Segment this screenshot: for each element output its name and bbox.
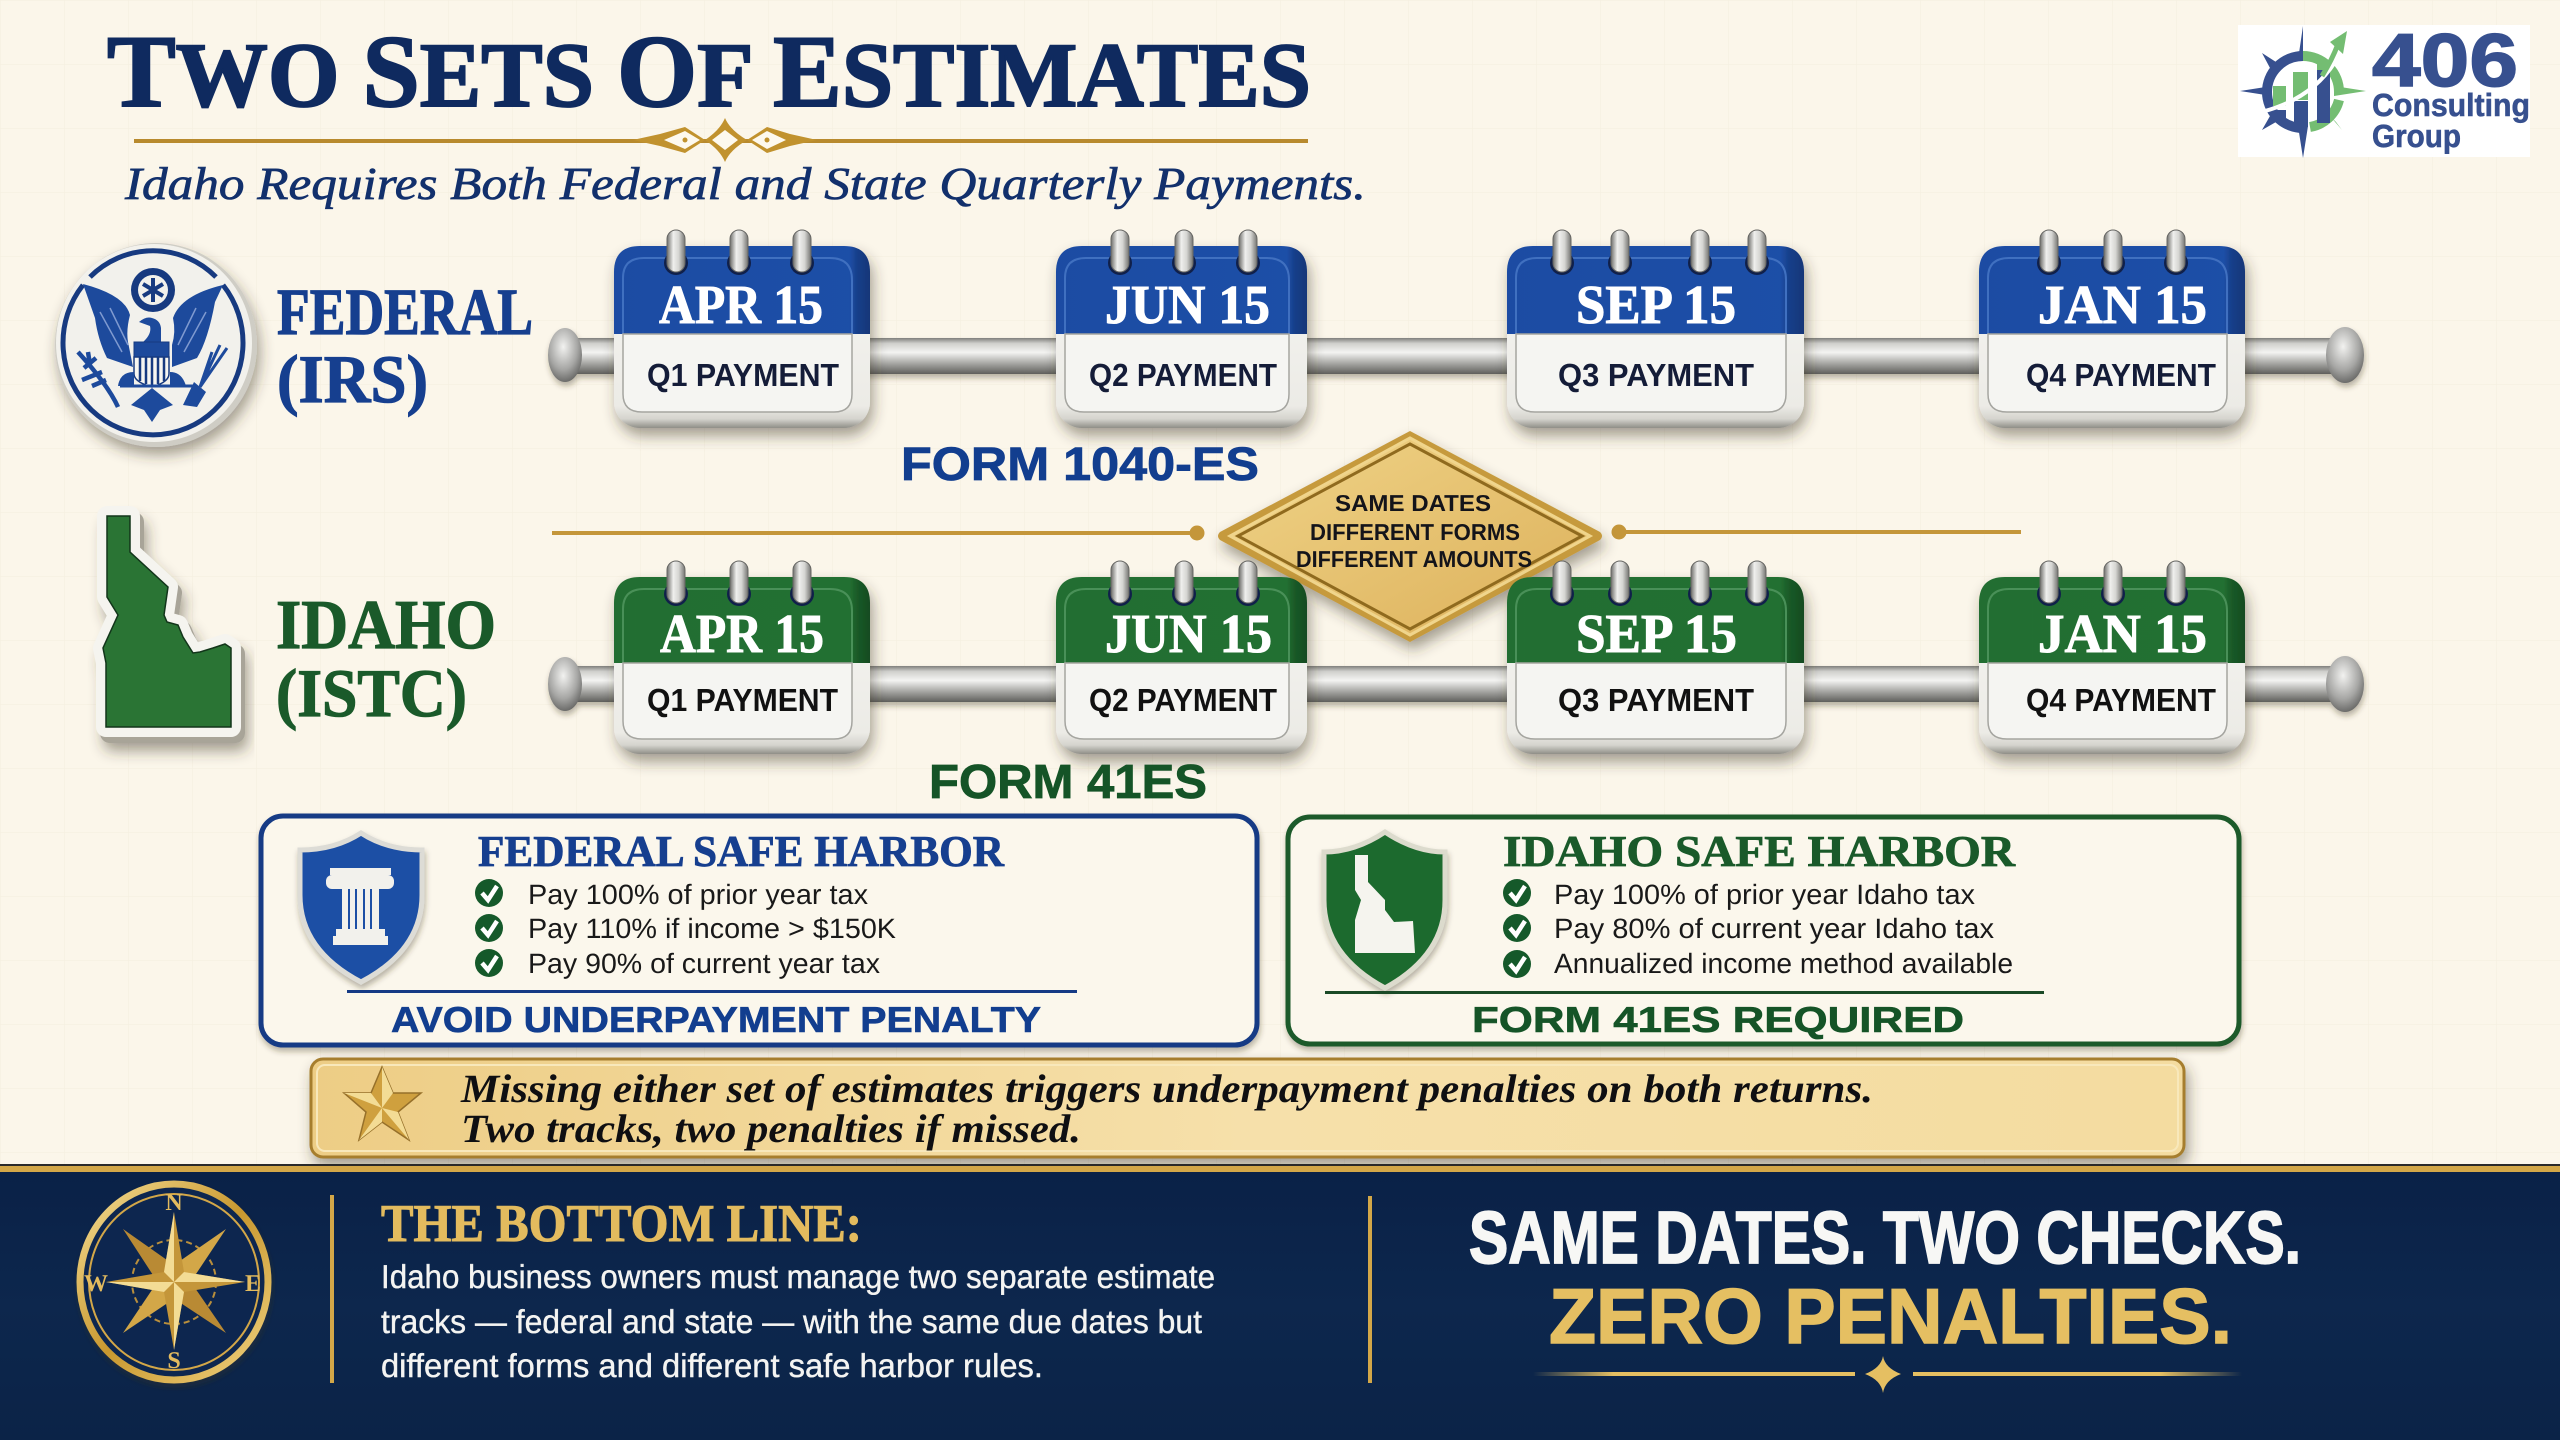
calendar: federal Q1: APR 15	[659, 274, 823, 335]
calendar: Idaho Q4: JAN 15	[2038, 603, 2207, 664]
logo: 406 Consulting Group: 406	[2372, 18, 2518, 102]
calendar: Idaho Q1	[614, 561, 870, 754]
divider left	[330, 1195, 334, 1383]
logo: 406 Consulting Group: Group	[2372, 118, 2461, 154]
calendar: federal Q4: Q4 PAYMENT	[2026, 357, 2216, 393]
checklist: federal rules: Pay 100% of prior year tax	[528, 879, 868, 910]
checklist: federal rules: Pay 90% of current year tax	[528, 948, 880, 979]
calendar: Idaho Q4	[1979, 561, 2245, 754]
body text: bottom line	[381, 1258, 1215, 1384]
logo: 406 Consulting Group	[2238, 18, 2530, 158]
heading: Idaho safe harbor: IDAHO SAFE HARBOR	[1503, 827, 2016, 876]
calendar: federal Q2: Q2 PAYMENT	[1089, 357, 1277, 393]
calendar: federal Q2: JUN 15	[1105, 274, 1270, 335]
divider right	[1368, 1196, 1372, 1383]
calendar: Idaho Q2	[1056, 561, 1307, 754]
calendar: Idaho Q2: JUN 15	[1105, 603, 1272, 664]
callout diamond: same dates: SAME DATES	[1335, 490, 1491, 516]
callout diamond: same dates	[1218, 431, 1602, 642]
checklist: Idaho rules: Pay 80% of current year Idaho tax	[1554, 913, 1994, 944]
calendar: federal Q2	[1056, 230, 1307, 428]
calendar: federal Q4: JAN 15	[2038, 274, 2207, 335]
Idaho timeline rod	[548, 656, 2364, 712]
body text: bottom line: different forms and different safe harbor rules.	[381, 1347, 1043, 1384]
calendar: Idaho Q3: SEP 15	[1576, 603, 1737, 664]
calendar: federal Q3: Q3 PAYMENT	[1558, 357, 1754, 393]
icon: compass rose	[80, 1184, 268, 1380]
calendar: federal Q1: Q1 PAYMENT	[647, 357, 839, 393]
calendar: Idaho Q4: Q4 PAYMENT	[2026, 682, 2216, 718]
label: Idaho (ISTC): IDAHO	[276, 587, 496, 664]
label: Federal (IRS): (IRS)	[277, 341, 428, 417]
federal timeline rod	[548, 327, 2364, 383]
panel footer: avoid underpayment penalty: AVOID UNDERPAYMENT PENALTY	[391, 999, 1041, 1040]
icon: compass rose: S	[167, 1348, 181, 1374]
slogan ornament	[1533, 1356, 2242, 1393]
body text: bottom line: Idaho business owners must manage two separate estimate	[381, 1258, 1215, 1295]
icon: federal eagle seal	[55, 243, 257, 447]
slogan: ZERO PENALTIES.	[1549, 1272, 2232, 1360]
icon: Idaho state shape	[103, 516, 235, 733]
calendar: Idaho Q3: Q3 PAYMENT	[1558, 682, 1754, 718]
title divider ornament	[134, 118, 1308, 162]
callout diamond: same dates: DIFFERENT FORMS	[1310, 519, 1520, 545]
calendar: Idaho Q2: Q2 PAYMENT	[1089, 682, 1277, 718]
body text: bottom line: tracks — federal and state — with the same due dates but	[381, 1303, 1202, 1340]
heading: the bottom line: THE BOTTOM LINE:	[381, 1195, 862, 1253]
icon: compass rose: W	[84, 1271, 108, 1297]
calendar: federal Q3	[1507, 230, 1804, 428]
checklist: Idaho rules: Annualized income method available	[1554, 948, 2013, 979]
banner text: Missing either set of estimates triggers underpayment penalties on both returns.	[460, 1066, 1873, 1111]
banner text	[460, 1066, 1873, 1151]
icon: compass rose: E	[245, 1271, 261, 1297]
checklist: Idaho rules	[1503, 879, 2013, 979]
logo: 406 Consulting Group: Consulting	[2372, 87, 2530, 123]
icon: compass rose: N	[165, 1190, 183, 1216]
checklist: federal rules: Pay 110% if income > $150K	[528, 913, 896, 944]
icon: federal shield with pillar	[300, 833, 422, 982]
gold connector right	[1612, 524, 2021, 540]
form label: Form 1040-ES: FORM 1040-ES	[901, 437, 1259, 490]
bottom band	[0, 1164, 2560, 1440]
slogan: SAME DATES. TWO CHECKS.	[1469, 1196, 2301, 1279]
form label: Form 41ES: FORM 41ES	[929, 756, 1207, 809]
label: Idaho (ISTC)	[276, 587, 496, 731]
banner text: Two tracks, two penalties if missed.	[461, 1106, 1081, 1151]
checklist: Idaho rules: Pay 100% of prior year Idaho tax	[1554, 879, 1975, 910]
subtitle: Idaho Requires Both Federal and State Quarterly Payments.	[124, 158, 1366, 209]
heading: federal safe harbor: FEDERAL SAFE HARBOR	[478, 827, 1005, 876]
checklist: federal rules	[475, 879, 896, 979]
calendar: Idaho Q3	[1507, 561, 1804, 754]
gold connector left	[552, 526, 1204, 540]
title: TWO SETS OF ESTIMATES	[107, 15, 1311, 129]
callout banner: penalty warning	[311, 1059, 2184, 1157]
calendar: Idaho Q1: Q1 PAYMENT	[647, 682, 838, 718]
icon: Idaho shield	[1324, 832, 1445, 988]
calendar: federal Q1	[614, 230, 870, 428]
calendar: Idaho Q1: APR 15	[660, 603, 824, 664]
label: Federal (IRS)	[277, 276, 533, 417]
panel: federal safe harbor	[261, 816, 1257, 1045]
icon: gold star	[344, 1067, 421, 1140]
panel: Idaho safe harbor	[1288, 817, 2239, 1044]
callout diamond: same dates: DIFFERENT AMOUNTS	[1296, 546, 1532, 572]
calendar: federal Q4	[1979, 230, 2245, 428]
panel footer: Form 41ES required: FORM 41ES REQUIRED	[1472, 999, 1964, 1040]
label: Idaho (ISTC): (ISTC)	[276, 655, 467, 731]
calendar: federal Q3: SEP 15	[1576, 274, 1736, 335]
slogan	[1469, 1196, 2301, 1360]
label: Federal (IRS): FEDERAL	[277, 276, 533, 349]
